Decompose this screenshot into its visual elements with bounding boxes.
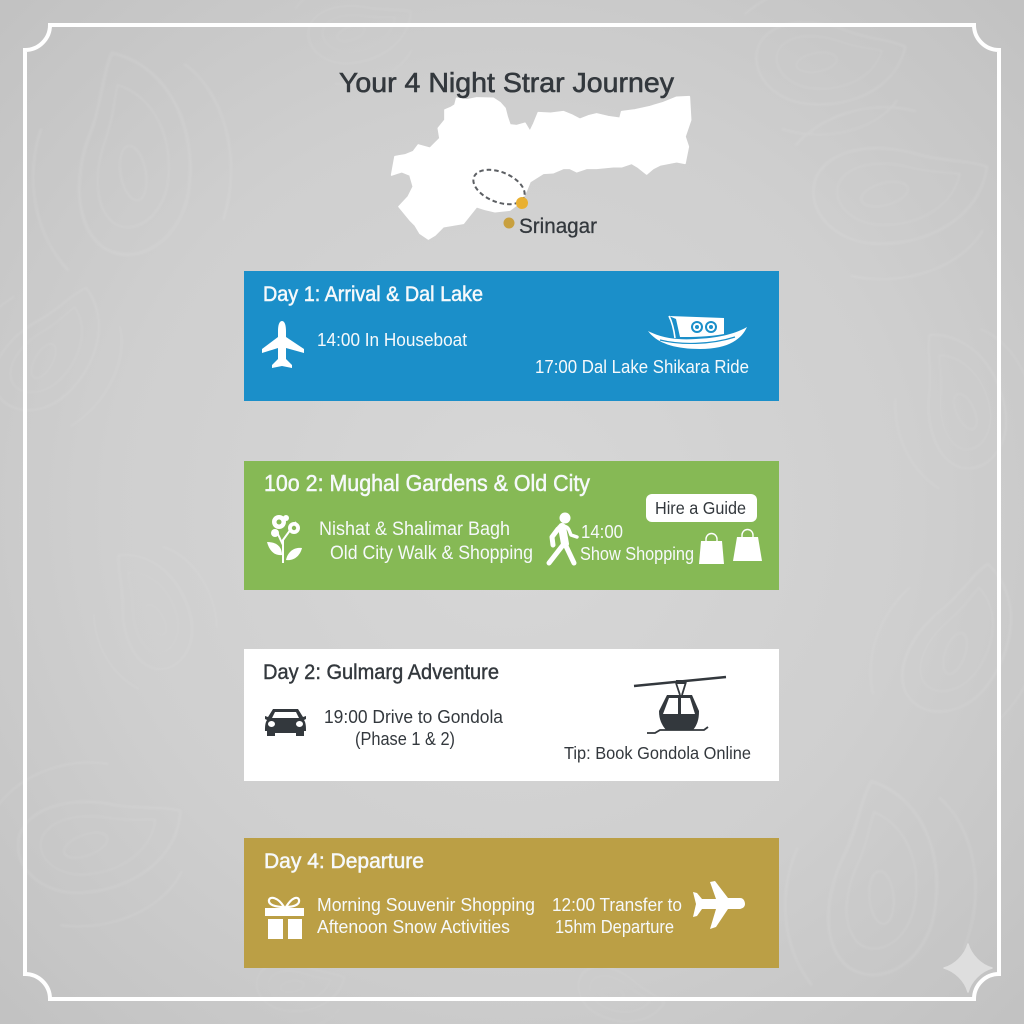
heading: gardens: 10o 2: Mughal Gardens & Old City [264, 470, 590, 496]
text: gardens and walk: Old City Walk & Shopping [330, 543, 533, 564]
callout: Hire a Guide: Hire a Guide [655, 498, 746, 518]
heading: departure: Day 4: Departure [264, 850, 424, 873]
text: 14:00 show shopping: 14:00 [581, 522, 623, 542]
heading: Day 1: Day 1: Arrival & Dal Lake [263, 283, 483, 306]
text: drive to gondola: 19:00 Drive to Gondola [324, 707, 504, 727]
icon: departure airplane [693, 881, 745, 929]
icon: airplane [262, 321, 304, 368]
icon: shikara boat [648, 316, 747, 349]
icon: walking person [549, 512, 577, 563]
text: transfer and departure: 15hm Departure [555, 916, 674, 937]
route stop marker [516, 197, 528, 209]
icon: car [265, 709, 306, 736]
text: transfer and departure: 12:00 Transfer to [552, 894, 682, 915]
icon: four-point star [944, 944, 992, 992]
map silhouette [392, 97, 691, 239]
icon: flower plant [267, 515, 302, 563]
text: 14:00 show shopping: Show Shopping [580, 544, 694, 564]
dashed route loop [468, 163, 530, 211]
title: Your 4 Night Strar Journey [339, 67, 674, 98]
heading: Gulmarg: Day 2: Gulmarg Adventure [263, 661, 499, 684]
Srinagar marker [504, 218, 514, 228]
panel: Day 1 [244, 271, 779, 401]
text: gondola tip: Tip: Book Gondola Online [564, 743, 751, 763]
text: morning and afternoon: Morning Souvenir Shopping [317, 894, 535, 915]
map: Kashmir region with route [392, 97, 691, 239]
Srinagar label: Srinagar [519, 215, 597, 238]
panel: Day 4 departure [244, 838, 779, 968]
panel: Gulmarg day [244, 649, 779, 781]
text: houseboat time: 14:00 In Houseboat [317, 329, 467, 350]
icon: gondola [634, 677, 726, 733]
text: 14:00 show shopping [580, 522, 694, 564]
text: transfer and departure [552, 894, 682, 937]
text: morning and afternoon: Aftenoon Snow Activities [317, 916, 510, 937]
icon: gift box [265, 898, 304, 939]
panel: Day 2 gardens [244, 461, 779, 590]
text: shikara ride: 17:00 Dal Lake Shikara Ride [535, 356, 749, 377]
text: gardens and walk: Nishat & Shalimar Bagh [319, 519, 510, 540]
text: gardens and walk [319, 519, 533, 564]
text: drive to gondola: (Phase 1 & 2) [355, 729, 455, 749]
text: drive to gondola [324, 707, 504, 749]
icon: shopping bags [699, 530, 762, 564]
text: morning and afternoon [317, 894, 535, 937]
callout: Hire a Guide [646, 494, 757, 522]
